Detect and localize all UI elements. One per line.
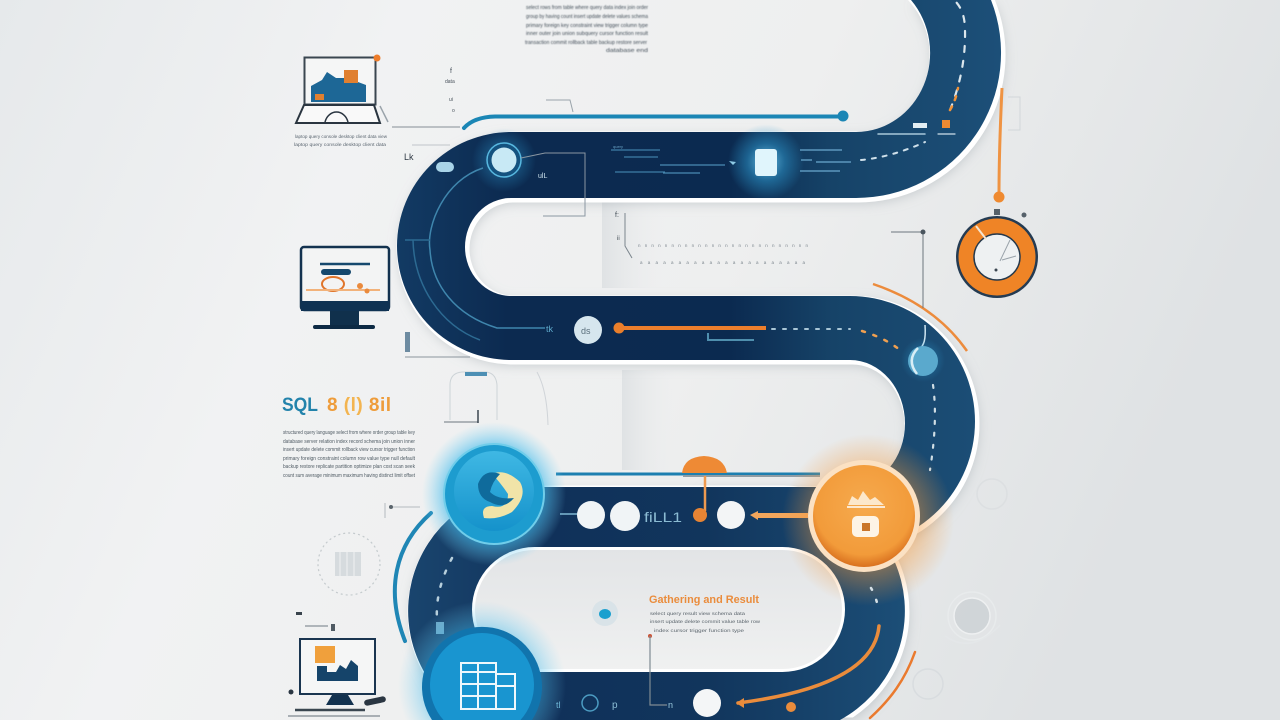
small laptop annotations: ui [449, 97, 453, 103]
upper road node: glowing circle [436, 128, 585, 216]
callout text middle: a a a a a a a a a a a a a a a a a a a a a a [640, 260, 805, 265]
outline card above blue node [444, 372, 548, 425]
upper road node: glowing square [728, 124, 804, 200]
lower pill center mark and heading: index cursor trigger function type [654, 628, 745, 633]
top text block: transaction commit rollback table backup restore server [525, 40, 647, 46]
lower road rail and dome [556, 456, 820, 511]
dashed route lower right [736, 588, 915, 718]
icon: laptop: laptop query console desktop client data [294, 142, 387, 147]
left bend guide lines [405, 168, 545, 340]
middle road node and orange bar [546, 316, 766, 344]
orange glowing node [782, 434, 954, 606]
bottom road nodes: p [612, 700, 618, 711]
lower pill center mark and heading: insert update delete commit value table row [650, 619, 761, 624]
small laptop annotations [392, 68, 573, 162]
sql heading and text block: backup restore replicate partition optimize plan cost scan seek [283, 464, 415, 470]
top text block: primary foreign key constraint view trigger column type [526, 23, 648, 29]
icon: laptop [294, 54, 388, 147]
lower road nodes [560, 501, 808, 531]
blue glowing python node [422, 422, 566, 566]
small annotation left [296, 503, 420, 631]
lower road nodes: fiLL1 [644, 509, 682, 525]
sql heading and text block: database server relation index record schema join union inner [283, 439, 415, 445]
middle right node [901, 338, 945, 382]
bottom road nodes: n [668, 700, 673, 710]
sql heading and text block: SQL [282, 395, 318, 416]
bottom road nodes [556, 689, 721, 717]
faint circle: left [318, 533, 380, 595]
inner panels of the road bends [602, 202, 682, 470]
middle road node and orange bar: ds [581, 326, 591, 336]
lower pill center mark and heading: select query result view schema data [650, 611, 746, 616]
small laptop annotations: o [452, 108, 455, 114]
top text block: database end [606, 48, 648, 54]
orange gauge [956, 209, 1038, 298]
sql heading and text block: insert update delete commit rollback view cursor trigger function [283, 447, 415, 453]
icon: laptop: laptop query console desktop client data view [295, 134, 388, 139]
upper road node: glowing circle: ulL [538, 173, 547, 180]
sql heading and text block: 8 (l) 8il [327, 395, 391, 416]
sql heading and text block: structured query language select from where order group table key [283, 430, 415, 436]
icon: table [461, 663, 515, 709]
dashed route on middle right bend [772, 329, 935, 470]
sql heading and text block: primary foreign constraint column row value type null default [283, 456, 416, 462]
orange drop line [994, 88, 1020, 202]
upper road text: query [613, 144, 623, 149]
top text block [525, 5, 649, 54]
callout text middle [615, 212, 808, 265]
sql heading and text block [282, 395, 416, 479]
lower pill center mark and heading: Gathering and Result [649, 594, 759, 606]
small laptop annotations: f [450, 68, 452, 75]
top text block: group by having count insert update delete values schema [526, 14, 649, 20]
middle road node and orange bar: tk [546, 324, 554, 334]
callout text middle: n n n n n n n n n n n n n n n n n n n n n n n n n n [638, 243, 808, 248]
lower pill center mark and heading [592, 594, 761, 705]
blue table node [398, 601, 566, 720]
mid left connector [405, 332, 470, 357]
small laptop annotations: Lk [404, 152, 414, 162]
small laptop annotations: data [445, 79, 455, 85]
upper road text [611, 144, 851, 173]
faint circles: right [913, 479, 1007, 699]
callout text middle: ii [617, 236, 620, 242]
lower left arc and dashes [395, 513, 452, 641]
callout text middle: f: [615, 212, 619, 219]
monitor: bar chart [288, 639, 386, 716]
top text block: inner outer join union subquery cursor function result [526, 31, 648, 37]
monitor [301, 247, 389, 329]
dashed route on top right bend [861, 2, 965, 160]
bottom road nodes: tl [556, 700, 561, 710]
blue line above road [464, 110, 848, 128]
orange arc and callout line [873, 230, 967, 351]
serpentine road [397, 0, 1004, 720]
sql heading and text block: count sum average minimum maximum having distinct limit offset [283, 473, 416, 479]
top text block: select rows from table where query data index join order [526, 5, 648, 11]
